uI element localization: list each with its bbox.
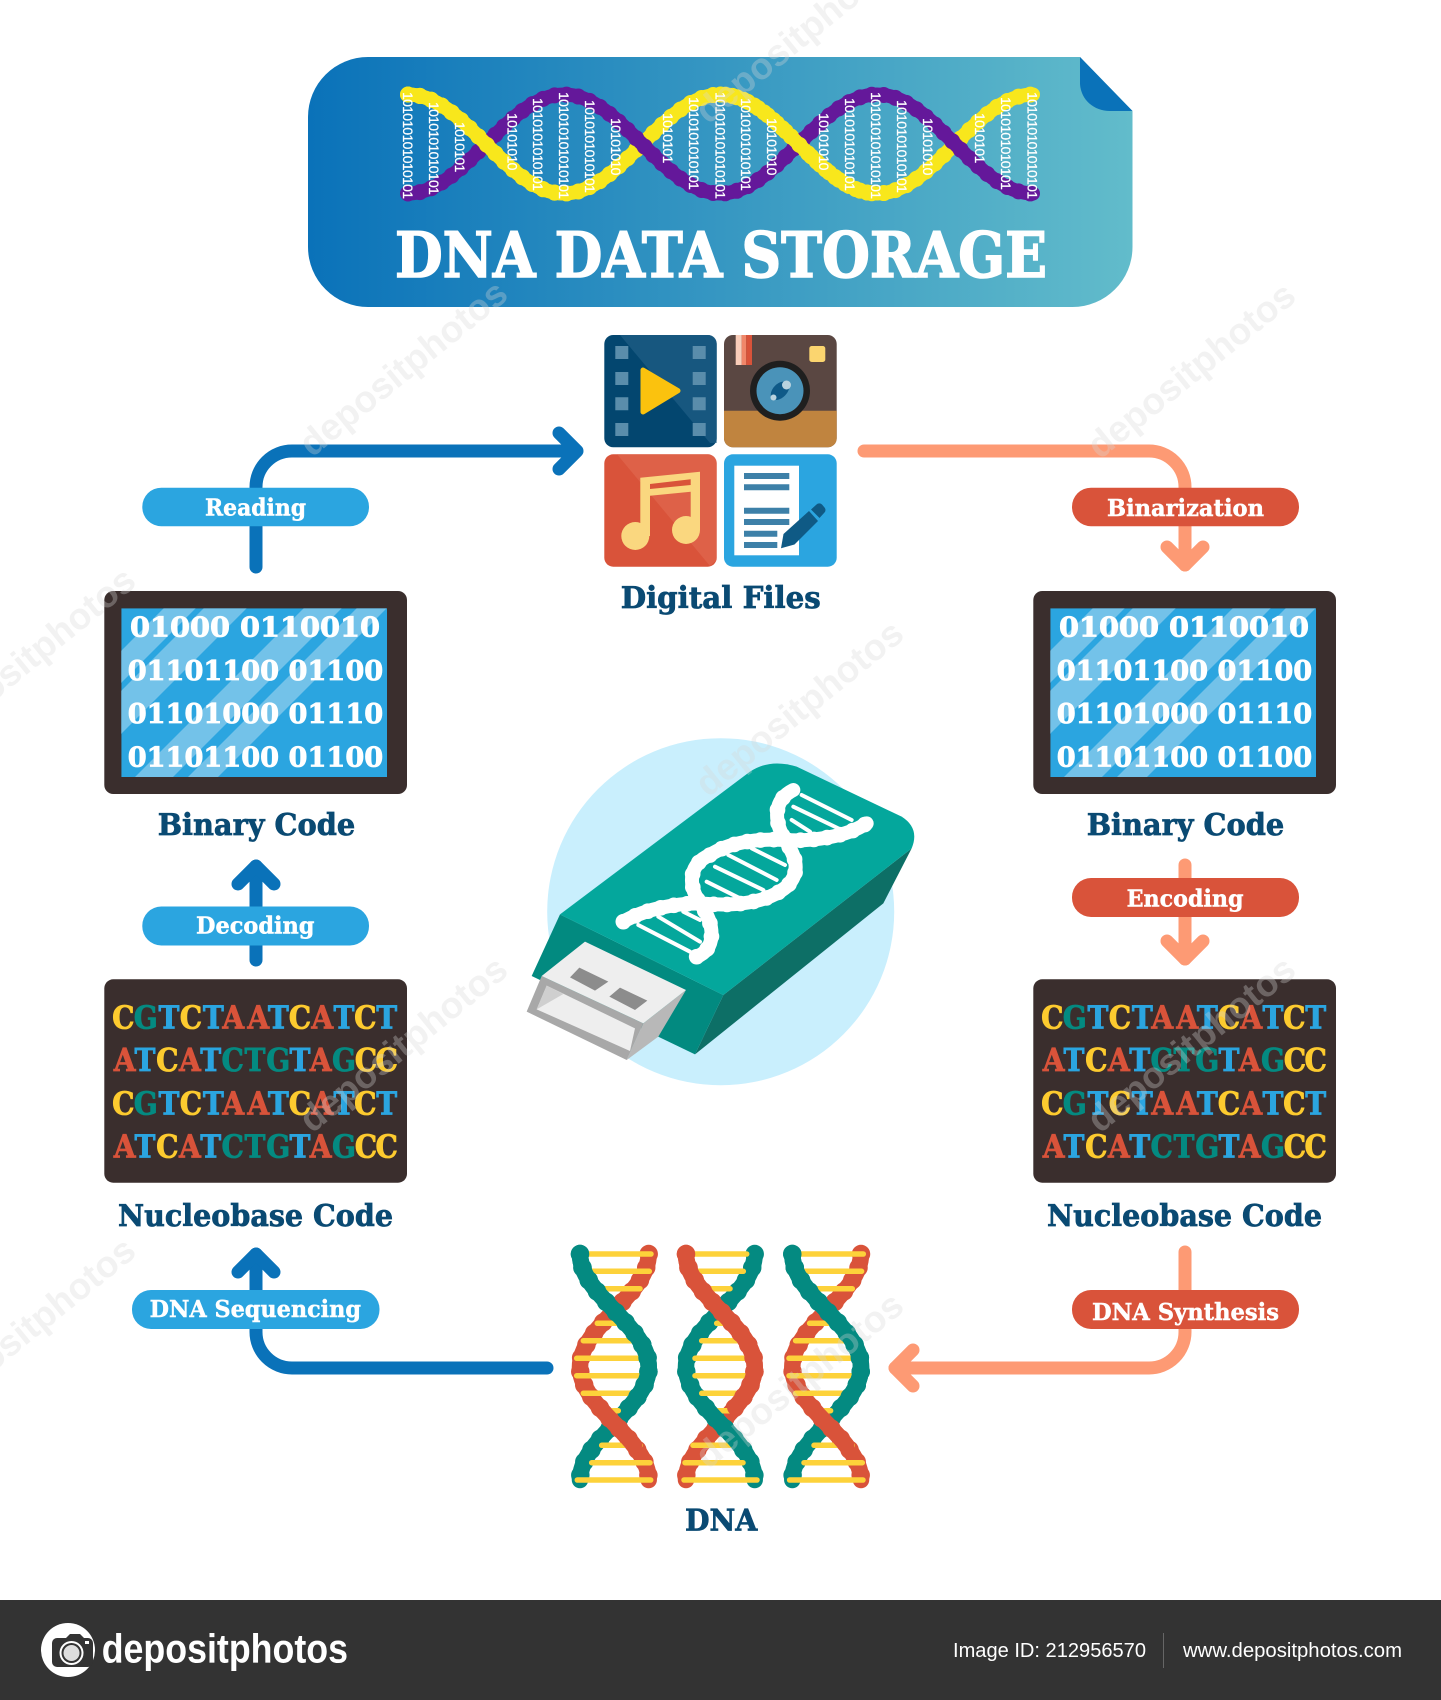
pill: encoding: Encoding — [1127, 886, 1244, 912]
nucleobase letters: CGTCTAATCATCT — [112, 1000, 398, 1037]
arrow: reading — [256, 433, 577, 567]
nucleobase letters: ATCATCTGTAGCC — [113, 1042, 398, 1079]
watermarks — [0, 0, 1303, 1476]
icon: video film — [604, 335, 717, 447]
nucleobase letters: ATCATCTGTAGCC — [113, 1129, 398, 1166]
watermarks: depositphotos — [1079, 948, 1303, 1140]
banner background — [308, 57, 1132, 307]
panel: nucleobase code right — [1033, 979, 1336, 1234]
pill: dna sequencing: DNA Sequencing — [150, 1296, 361, 1323]
label: nucleobase code: Nucleobase Code — [118, 1199, 393, 1234]
dna helices — [577, 1254, 863, 1539]
title banner — [308, 57, 1132, 307]
binary rungs of banner helix: 1010101010101 — [998, 97, 1014, 190]
label: binary code: Binary Code — [1087, 808, 1284, 843]
nucleobase letters — [112, 1000, 398, 1166]
binary digits — [1057, 612, 1312, 774]
dna helix three — [789, 1254, 863, 1480]
binary digits: 01101000 01110 — [1057, 698, 1312, 730]
pill: binarization: Binarization — [1107, 495, 1264, 522]
image id: Image ID: 212956570 — [953, 1640, 1146, 1662]
binary digits: 01000 0110010 — [130, 612, 380, 644]
label: nucleobase code: Nucleobase Code — [1047, 1199, 1322, 1234]
watermarks: depositphotos — [1079, 274, 1303, 466]
usb drive with dna — [527, 738, 914, 1085]
binary rungs of banner helix: 101010101010101 — [868, 92, 884, 199]
binary rungs of banner helix: 10101010 — [764, 118, 780, 176]
binary display — [121, 608, 387, 777]
binary digits — [128, 612, 383, 774]
binary rungs of banner helix: 1010101 — [972, 113, 988, 164]
nucleobase screen — [1033, 979, 1336, 1183]
watermarks: depositphotos — [687, 612, 911, 804]
binary digits: 01101100 01100 — [1057, 655, 1312, 687]
pill: decoding — [142, 906, 369, 946]
binary display — [1050, 608, 1316, 777]
footer bar — [0, 1600, 1441, 1700]
binary rungs of banner helix: 1010101 — [452, 122, 468, 173]
binary rungs of banner helix: 10101010 — [608, 118, 624, 176]
watermarks: depositphotos — [291, 948, 515, 1140]
binary rungs of banner helix: 1010101010101 — [426, 102, 442, 195]
arrow: binarization — [864, 451, 1203, 565]
panel: binary code left — [104, 591, 407, 842]
pill: encoding — [1072, 878, 1299, 917]
pill: binarization — [1072, 488, 1299, 526]
arrow: dna synthesis — [895, 1252, 1185, 1386]
watermarks: depositphotos — [291, 272, 515, 464]
panel: binary code right — [1033, 591, 1336, 842]
icon: music note — [604, 454, 717, 567]
binary rungs of banner helix: 101010101010101 — [556, 92, 572, 199]
binary rungs of banner helix: 1010101010101 — [738, 98, 754, 191]
banner folded corner — [1080, 57, 1132, 111]
label: binary code: Binary Code — [158, 808, 355, 843]
binary rungs of banner helix: 1010101010101 — [842, 98, 858, 191]
banner title text: DNA DATA STORAGE — [395, 218, 1047, 292]
watermarks: depositphotos — [687, 1284, 911, 1476]
binary screen — [1033, 591, 1336, 794]
digital files icons — [604, 335, 837, 616]
binary rungs of banner helix: 1010101010101 — [582, 100, 598, 193]
binary digits: 01101100 01100 — [128, 655, 383, 687]
icon: document and pencil — [724, 454, 837, 567]
dna helix one — [577, 1254, 651, 1480]
binary rungs of banner helix: 101010101010101 — [1024, 92, 1040, 199]
nucleobase letters — [1041, 1000, 1327, 1166]
white dna icon — [623, 790, 867, 957]
binary screen — [104, 591, 407, 794]
banner helix strands — [408, 94, 1033, 194]
nucleobase letters: ATCATCTGTAGCC — [1042, 1129, 1327, 1166]
nucleobase screen — [104, 979, 407, 1183]
dna helix two — [684, 1254, 757, 1480]
arrow: decoding — [238, 866, 274, 960]
binary digits: 01101100 01100 — [128, 742, 383, 774]
pill: reading: Reading — [205, 495, 306, 522]
nucleobase letters: CGTCTAATCATCT — [1041, 1086, 1327, 1123]
usb connector — [527, 942, 686, 1060]
binary rungs of banner helix: 1010101010101 — [530, 98, 546, 191]
panel: nucleobase code left — [104, 979, 407, 1234]
arrow: encoding — [1167, 865, 1203, 959]
binary rungs of banner helix — [400, 92, 1040, 199]
binary digits: 01101100 01100 — [1057, 742, 1312, 774]
logo text: depositphotos — [102, 1626, 348, 1672]
arrow: dna sequencing — [238, 1254, 547, 1368]
pill: dna synthesis — [1072, 1290, 1299, 1329]
pill: reading — [142, 488, 369, 526]
logo icon — [41, 1623, 95, 1677]
label: digital files: Digital Files — [621, 581, 821, 616]
binary rungs of banner helix: 1010101010101 — [686, 97, 702, 190]
binary rungs of banner helix: 101010101010101 — [400, 92, 416, 199]
icon: camera — [724, 335, 837, 447]
pill: dna synthesis: DNA Synthesis — [1092, 1299, 1279, 1326]
label: dna: DNA — [685, 1504, 758, 1539]
pill: dna sequencing — [132, 1290, 380, 1329]
nucleobase letters: CGTCTAATCATCT — [1041, 1000, 1327, 1037]
binary rungs of banner helix: 1010101 — [660, 113, 676, 164]
binary rungs of banner helix: 10101010 — [920, 118, 936, 176]
binary rungs of banner helix: 10101010 — [816, 113, 832, 171]
light blue circle — [547, 738, 894, 1085]
pill: decoding: Decoding — [196, 912, 314, 940]
binary rungs of banner helix: 1010101010101 — [894, 100, 910, 193]
binary digits: 01000 0110010 — [1059, 612, 1309, 644]
nucleobase letters: ATCATCTGTAGCC — [1042, 1042, 1327, 1079]
binary digits: 01101000 01110 — [128, 698, 383, 730]
usb stick — [527, 763, 914, 1060]
website: www.depositphotos.com — [1182, 1640, 1402, 1662]
binary rungs of banner helix: 101010101010101 — [712, 92, 728, 199]
nucleobase letters: CGTCTAATCATCT — [112, 1086, 398, 1123]
binary rungs of banner helix: 10101010 — [504, 113, 520, 171]
